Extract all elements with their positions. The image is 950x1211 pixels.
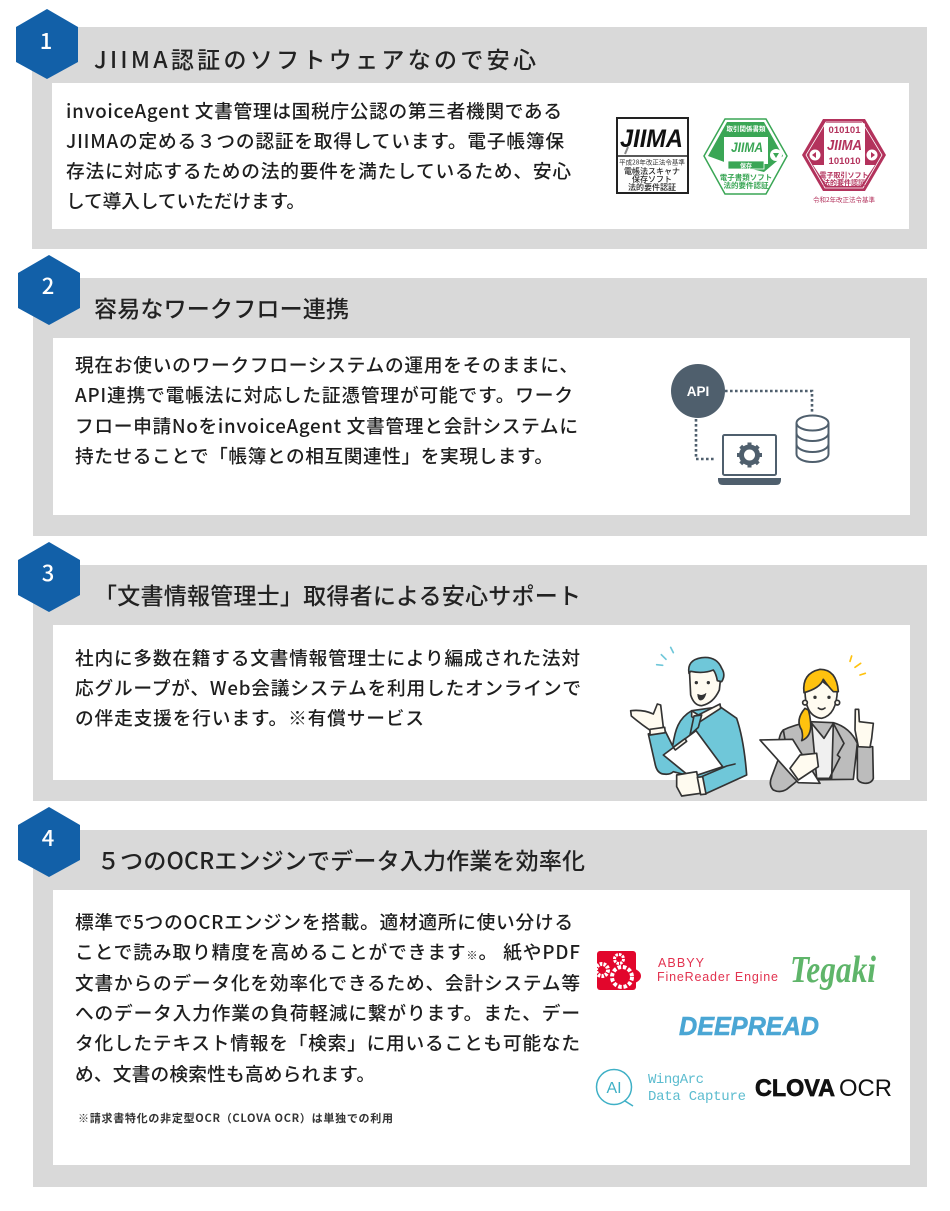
logo: WingArc Data Capture: WingArc [648,1072,704,1088]
icon: API circle: API [687,384,709,399]
text block 2: 現在お使いのワークフローシステムの運用をそのままに、 [75,351,578,378]
man [631,647,747,796]
text block 1 [66,97,571,214]
text block 1: 存法に対応するための法的要件を満たしているため、安心 [66,157,571,184]
logo: green document storage certification [704,119,787,194]
logo: red electronic transaction certification: 電子取引ソフト [820,170,868,180]
badge: number 3: 3 [42,556,54,588]
badge: number 2: 2 [42,269,54,301]
logo: red electronic transaction certification: 010101 [828,125,861,136]
illustration: two support staff [631,647,873,796]
badge: number 1 [16,9,78,79]
badge: number 1: 1 [40,24,52,56]
heading 1: JIIMA認証のソフトウェアなので安心 [94,41,536,75]
logo: green document storage certification: 保存 [740,161,752,170]
heading 3: 「文書情報管理士」取得者による安心サポート [94,577,581,611]
text block 3: の伴走支援を行います。※有償サービス [75,704,424,731]
logo: CLOVA OCR [755,1075,892,1102]
panel 3: support [18,542,927,801]
logo: JIIMA scanner certification [617,118,688,193]
logo: green document storage certification: 法的要件認証 [724,180,769,191]
logo: green document storage certification: 取引関係書類 [726,123,766,133]
footnote: ※請求書特化の非定型OCR（CLOVA OCR）は単独での利用 [78,1110,393,1126]
text block 3 [75,644,581,731]
logo: red electronic transaction certification: 令和2年改正法令基準 [813,194,876,204]
logo: JIIMA scanner certification: JIIMA [620,125,683,153]
text block 4: 標準で5つのOCRエンジンを搭載。適材適所に使い分ける [75,908,573,935]
heading 2: 容易なワークフロー連携 [94,290,349,324]
text block 4: め、文書の検索性も高められます。 [75,1060,375,1087]
logo: DEEPREAD: DEEPREAD [679,1011,819,1041]
icon: API circle [671,364,725,418]
logo: ABBYY FineReader Engine: ABBYY [658,956,705,970]
text block 1: JIIMAの定める３つの認証を取得しています。電子帳簿保 [66,127,564,154]
icon: laptop with gear [718,435,781,485]
logo: WingArc Data Capture [596,1070,746,1106]
logo: WingArc Data Capture: AI [606,1080,622,1097]
icon: database [796,416,828,462]
logo: red electronic transaction certification: JIIMA [827,137,862,154]
text block 2: フロー申請NoをinvoiceAgent 文書管理と会計システムに [75,412,578,439]
text block 2: API連携で電帳法に対応した証憑管理が可能です。ワーク [75,381,573,408]
logo: green document storage certification: 電子書類ソフト [720,172,772,183]
logo: JIIMA scanner certification: 平成28年改正法令基準 [619,156,685,166]
badge: number 2 [18,255,80,325]
logo: ABBYY FineReader Engine [596,951,778,990]
text block 4: ことで読み取り精度を高めることができます※。 紙やPDF [75,938,580,965]
woman [760,656,873,792]
text block 2: 持たせることで「帳簿との相互関連性」を実現します。 [75,442,553,469]
logo: JIIMA scanner certification: 法的要件認証 [628,182,676,193]
text block 2 [75,351,578,469]
text block 4: 文書からのデータ化を効率化できるため、会計システム等 [75,969,580,996]
logo: red electronic transaction certification [802,119,886,204]
panel 1: JIIMA certification [16,9,927,249]
logo: WingArc Data Capture: Data Capture [648,1089,746,1105]
logo: JIIMA scanner certification: 電帳法スキャナ [624,166,680,177]
text block 4: へのデータ入力作業の負荷軽減に繋がります。また、デー [75,999,580,1026]
heading 4: ５つのOCRエンジンでデータ入力作業を効率化 [97,842,585,876]
logo: JIIMA scanner certification: 保存ソフト [632,174,672,185]
text block 1: して導入していただけます。 [66,187,305,214]
panel 4: OCR engines [18,807,927,1187]
text block 3: 応グループが、Web会議システムを利用したオンラインで [75,674,581,701]
logo: CLOVA OCR: CLOVA [755,1075,835,1102]
diagram: API connection [671,364,828,485]
text block 3: 社内に多数在籍する文書情報管理士により編成された法対 [75,644,580,671]
text block 4 [75,908,580,1087]
text block 4: タ化したテキスト情報を「検索」に用いることも可能なた [75,1029,580,1056]
logo: CLOVA OCR: OCR [839,1075,892,1102]
badge: number 4: 4 [42,821,54,853]
badge: number 4 [18,807,80,877]
text block 1: invoiceAgent 文書管理は国税庁公認の第三者機関である [66,97,562,124]
logo: green document storage certification: JIIMA [731,139,763,155]
logo: red electronic transaction certification: 101010 [828,156,860,167]
badge: number 3 [18,542,80,612]
logo: Tegaki: Tegaki [790,949,876,991]
logo: ABBYY FineReader Engine: FineReader Engine [657,970,778,984]
logo: red electronic transaction certification: 法的要件認証 [823,178,865,188]
panel 2: workflow integration [18,255,927,536]
